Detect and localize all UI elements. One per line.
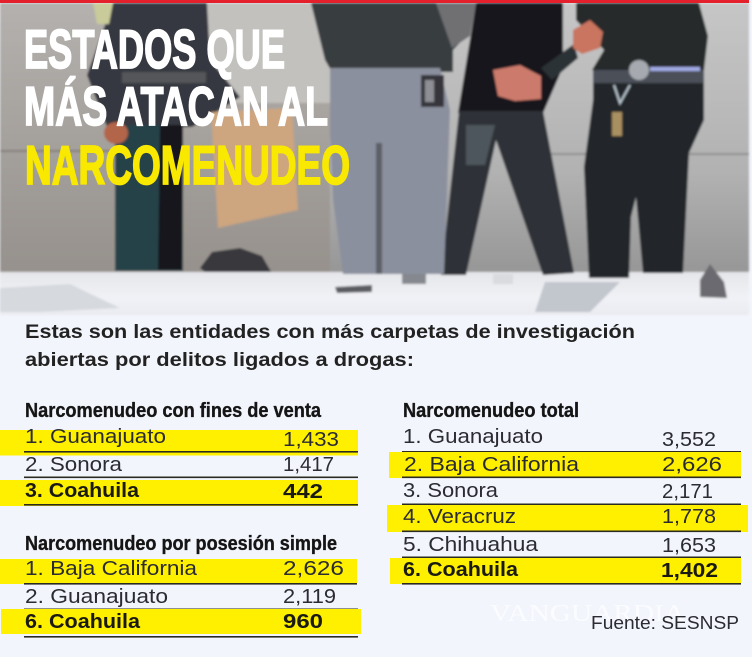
red top band xyxy=(0,0,749,3)
row: Chihuahua: 1,653 xyxy=(662,534,716,557)
row: Veracruz xyxy=(387,505,748,532)
row: Guanajuato xyxy=(24,585,358,610)
row: Sonora: 1,417 xyxy=(283,453,334,476)
left officer xyxy=(87,3,240,271)
row: Veracruz: 1,778 xyxy=(662,505,716,528)
intro text: abiertas por delitos ligados a drogas: xyxy=(25,350,414,371)
heading: Narcomenudeo por posesión simple xyxy=(25,533,337,555)
table: narcomenudeo total xyxy=(387,400,748,585)
row: Coahuila xyxy=(0,479,358,506)
row: Coahuila: 1,402 xyxy=(661,559,718,582)
row: Coahuila xyxy=(1,609,361,638)
right officer xyxy=(573,3,708,278)
row: Sonora xyxy=(24,453,358,478)
row: Baja California: 2. Baja California xyxy=(404,453,580,476)
row: Sonora: 2,171 xyxy=(662,480,713,503)
heading: Narcomenudeo total xyxy=(403,400,579,422)
center detained man xyxy=(441,3,578,275)
row: Guanajuato xyxy=(0,425,358,456)
title: ESTADOS QUE xyxy=(24,18,285,80)
row: Guanajuato: 1. Guanajuato xyxy=(25,425,166,448)
row: Baja California xyxy=(0,557,357,585)
watermark: VANGUARDIA xyxy=(490,601,686,627)
row: Sonora xyxy=(402,479,741,505)
photo floor xyxy=(0,264,749,315)
row: Baja California: 1. Baja California xyxy=(25,557,198,580)
row: Coahuila xyxy=(390,558,741,585)
row: Chihuahua: 5. Chihuahua xyxy=(403,533,539,556)
middle officer xyxy=(311,3,476,274)
row: Guanajuato: 1,433 xyxy=(283,428,339,451)
row: Coahuila: 960 xyxy=(283,610,323,633)
row: Guanajuato: 2,119 xyxy=(283,585,336,608)
heading: Narcomenudeo con fines de venta xyxy=(25,400,322,422)
intro text: Estas son las entidades con más carpetas de investigación xyxy=(25,322,635,343)
rubble on the ground xyxy=(200,248,273,281)
row: Sonora: 2. Sonora xyxy=(25,453,123,476)
row: Coahuila: 3. Coahuila xyxy=(25,479,140,502)
row: Sonora: 3. Sonora xyxy=(403,479,499,502)
row: Chihuahua xyxy=(402,533,741,558)
row: Guanajuato: 2. Guanajuato xyxy=(25,585,168,608)
intro text xyxy=(25,322,635,371)
table: narcomenudeo con fines de venta xyxy=(0,400,358,506)
row: Baja California: 2,626 xyxy=(283,557,344,580)
row: Coahuila: 6. Coahuila xyxy=(403,558,519,581)
title: NARCOMENUDEO xyxy=(25,134,350,196)
table: narcomenudeo por posesión simple xyxy=(0,533,361,638)
row: Coahuila: 6. Coahuila xyxy=(25,610,141,633)
row: Coahuila: 442 xyxy=(283,480,323,503)
row: Guanajuato: 3,552 xyxy=(662,428,716,451)
row: Veracruz: 4. Veracruz xyxy=(403,505,516,528)
paper bag xyxy=(211,108,298,228)
row: Guanajuato: 1. Guanajuato xyxy=(403,425,543,448)
source note: Fuente: SESNSP xyxy=(591,613,739,633)
row: Baja California xyxy=(389,452,741,478)
title: MÁS ATACAN AL xyxy=(24,75,328,137)
photo: police officers detaining a man xyxy=(0,3,749,315)
title xyxy=(24,18,350,196)
photo wall xyxy=(0,3,749,283)
row: Guanajuato xyxy=(402,425,741,453)
row: Baja California: 2,626 xyxy=(662,453,722,476)
